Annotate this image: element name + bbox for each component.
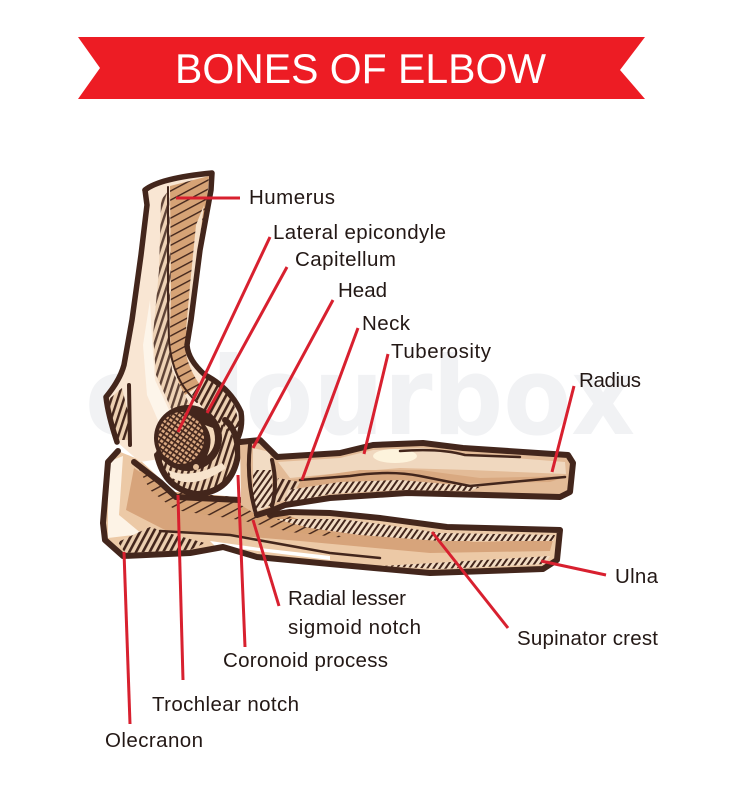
leader: Coronoid process: [238, 475, 245, 647]
capitellum: [154, 405, 222, 471]
label: Radial lesser sigmoid notch: sigmoid notch: [288, 616, 421, 639]
leader: Olecranon: [124, 552, 130, 724]
leader: Radius: [552, 386, 574, 472]
leader: Humerus: [176, 196, 240, 200]
label: Radial lesser sigmoid notch: Radial lesser: [288, 587, 406, 610]
leader: Ulna: [541, 561, 606, 575]
label: Ulna: Ulna: [615, 565, 659, 588]
leader: Capitellum: [207, 267, 287, 413]
label: Lateral epicondyle: Lateral epicondyle: [273, 221, 446, 244]
leader: Head: [253, 300, 333, 448]
title banner: [78, 37, 645, 99]
leader: Trochlear notch: [178, 495, 183, 680]
label: Capitellum: Capitellum: [295, 248, 396, 271]
leader: Neck: [302, 328, 358, 480]
label: Supinator crest: Supinator crest: [517, 627, 658, 650]
trochlea ring: [156, 417, 238, 494]
leader: Radial lesser sigmoid notch: [253, 520, 279, 606]
label: Neck: Neck: [362, 312, 411, 335]
label: Trochlear notch: Trochlear notch: [152, 693, 299, 716]
radius bone: [240, 440, 573, 515]
label: Head: Head: [338, 279, 387, 302]
leader: Tuberosity: [364, 354, 388, 454]
label: Tuberosity: Tuberosity: [391, 340, 492, 363]
watermark: colourbox: [85, 335, 635, 460]
label: Humerus: Humerus: [249, 186, 335, 209]
humerus bone: [106, 173, 242, 462]
illustration: elbow bones: [103, 173, 573, 573]
label: Radius: Radius: [579, 369, 641, 392]
leader: Supinator crest: [432, 532, 508, 628]
ulna bone: [103, 451, 560, 573]
leader: Lateral epicondyle: [178, 237, 270, 432]
title: BONES OF ELBOW: [175, 45, 546, 92]
label: Olecranon: Olecranon: [105, 729, 203, 752]
label: Coronoid process: Coronoid process: [223, 649, 388, 672]
